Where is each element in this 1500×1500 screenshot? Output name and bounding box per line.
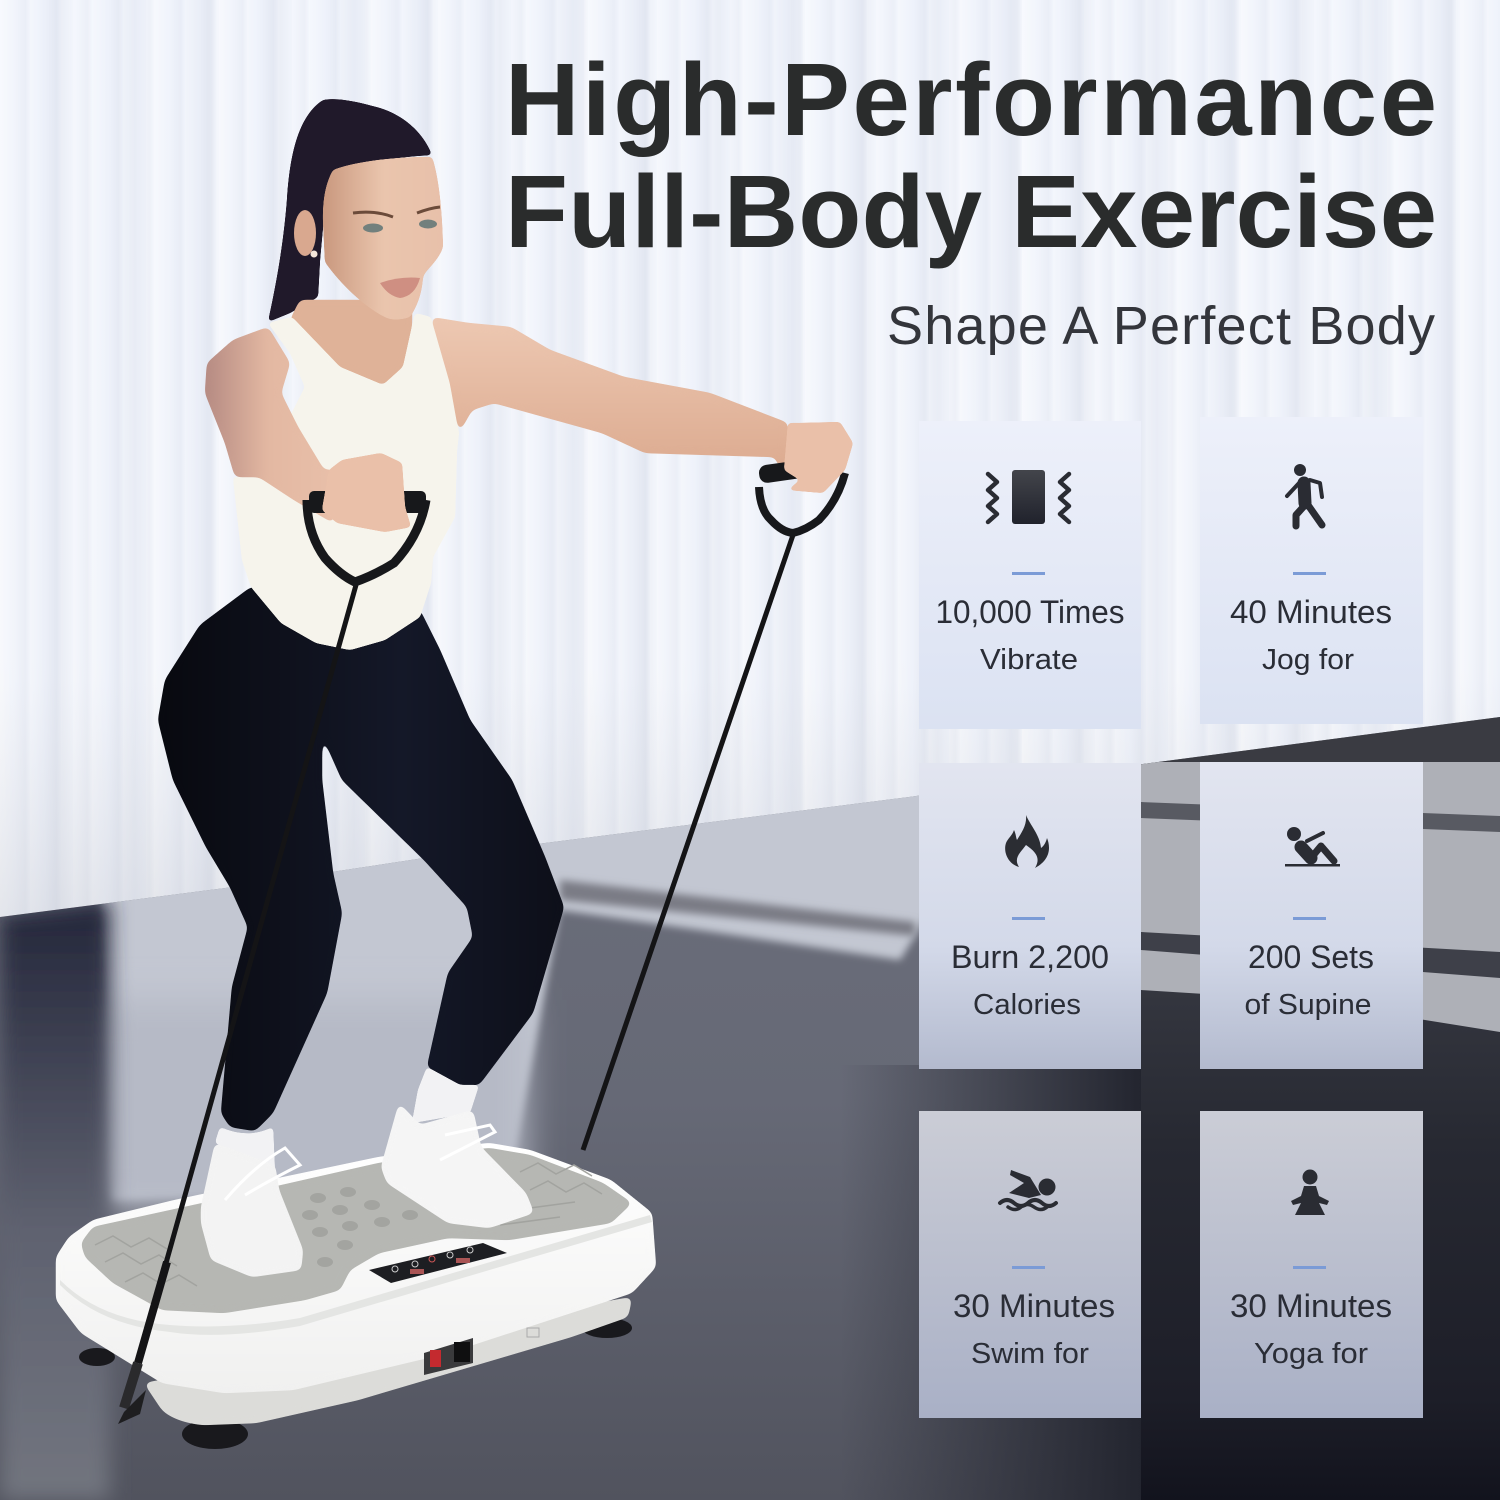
icon: sit-up — [1285, 827, 1340, 866]
card: yoga — [1200, 1111, 1423, 1418]
icon: swimmer — [1000, 1170, 1056, 1210]
card: swim: 30 Minutes — [953, 1288, 1115, 1324]
card: swim: Swim for — [971, 1338, 1089, 1370]
icon: walker — [1287, 464, 1322, 526]
card: yoga: 30 Minutes — [1230, 1288, 1392, 1324]
card: calories: Burn 2,200 — [951, 939, 1109, 975]
facial features — [310, 207, 440, 298]
far hand — [784, 422, 853, 493]
front hand — [322, 453, 411, 532]
card: jog: Jog for — [1262, 644, 1354, 676]
card: jog: 40 Minutes — [1230, 594, 1392, 630]
card: calories: Calories — [973, 989, 1081, 1021]
card: vibrate — [919, 421, 1141, 729]
icon: meditating figure — [1291, 1170, 1329, 1215]
front resistance band and handle — [118, 453, 426, 1424]
card: yoga: Yoga for — [1254, 1338, 1368, 1370]
card: supine: 200 Sets — [1248, 939, 1374, 975]
subtitle: Shape A Perfect Body — [887, 296, 1435, 356]
rear resistance band and handle — [583, 422, 853, 1150]
body silhouette — [158, 99, 788, 1277]
plate power socket — [424, 1338, 473, 1375]
title: High-Performance — [505, 42, 1437, 157]
card: supine: of Supine — [1244, 989, 1372, 1021]
card: swim — [919, 1111, 1141, 1418]
title — [505, 42, 1437, 269]
plate mat chevrons — [95, 1163, 602, 1286]
card: vibrate: 10,000 Times — [936, 594, 1124, 630]
background: floor — [0, 700, 1500, 1500]
shoelaces — [225, 1125, 495, 1200]
title: Full-Body Exercise — [505, 154, 1437, 269]
card: jog — [1200, 417, 1423, 724]
plate control panel — [369, 1243, 507, 1283]
icon: flame — [1005, 815, 1049, 868]
card: supine — [1200, 762, 1423, 1069]
plate vent mark — [527, 1328, 539, 1337]
card: calories — [919, 763, 1141, 1069]
plate feet — [79, 1318, 632, 1449]
vibration plate machine — [56, 1143, 656, 1449]
card: vibrate: Vibrate — [980, 644, 1078, 676]
woman — [158, 99, 788, 1277]
plate body — [56, 1143, 656, 1425]
background: curtain wall — [0, 0, 1500, 930]
plate massage nodes — [302, 1187, 418, 1267]
icon: vibrating phone — [988, 470, 1069, 524]
